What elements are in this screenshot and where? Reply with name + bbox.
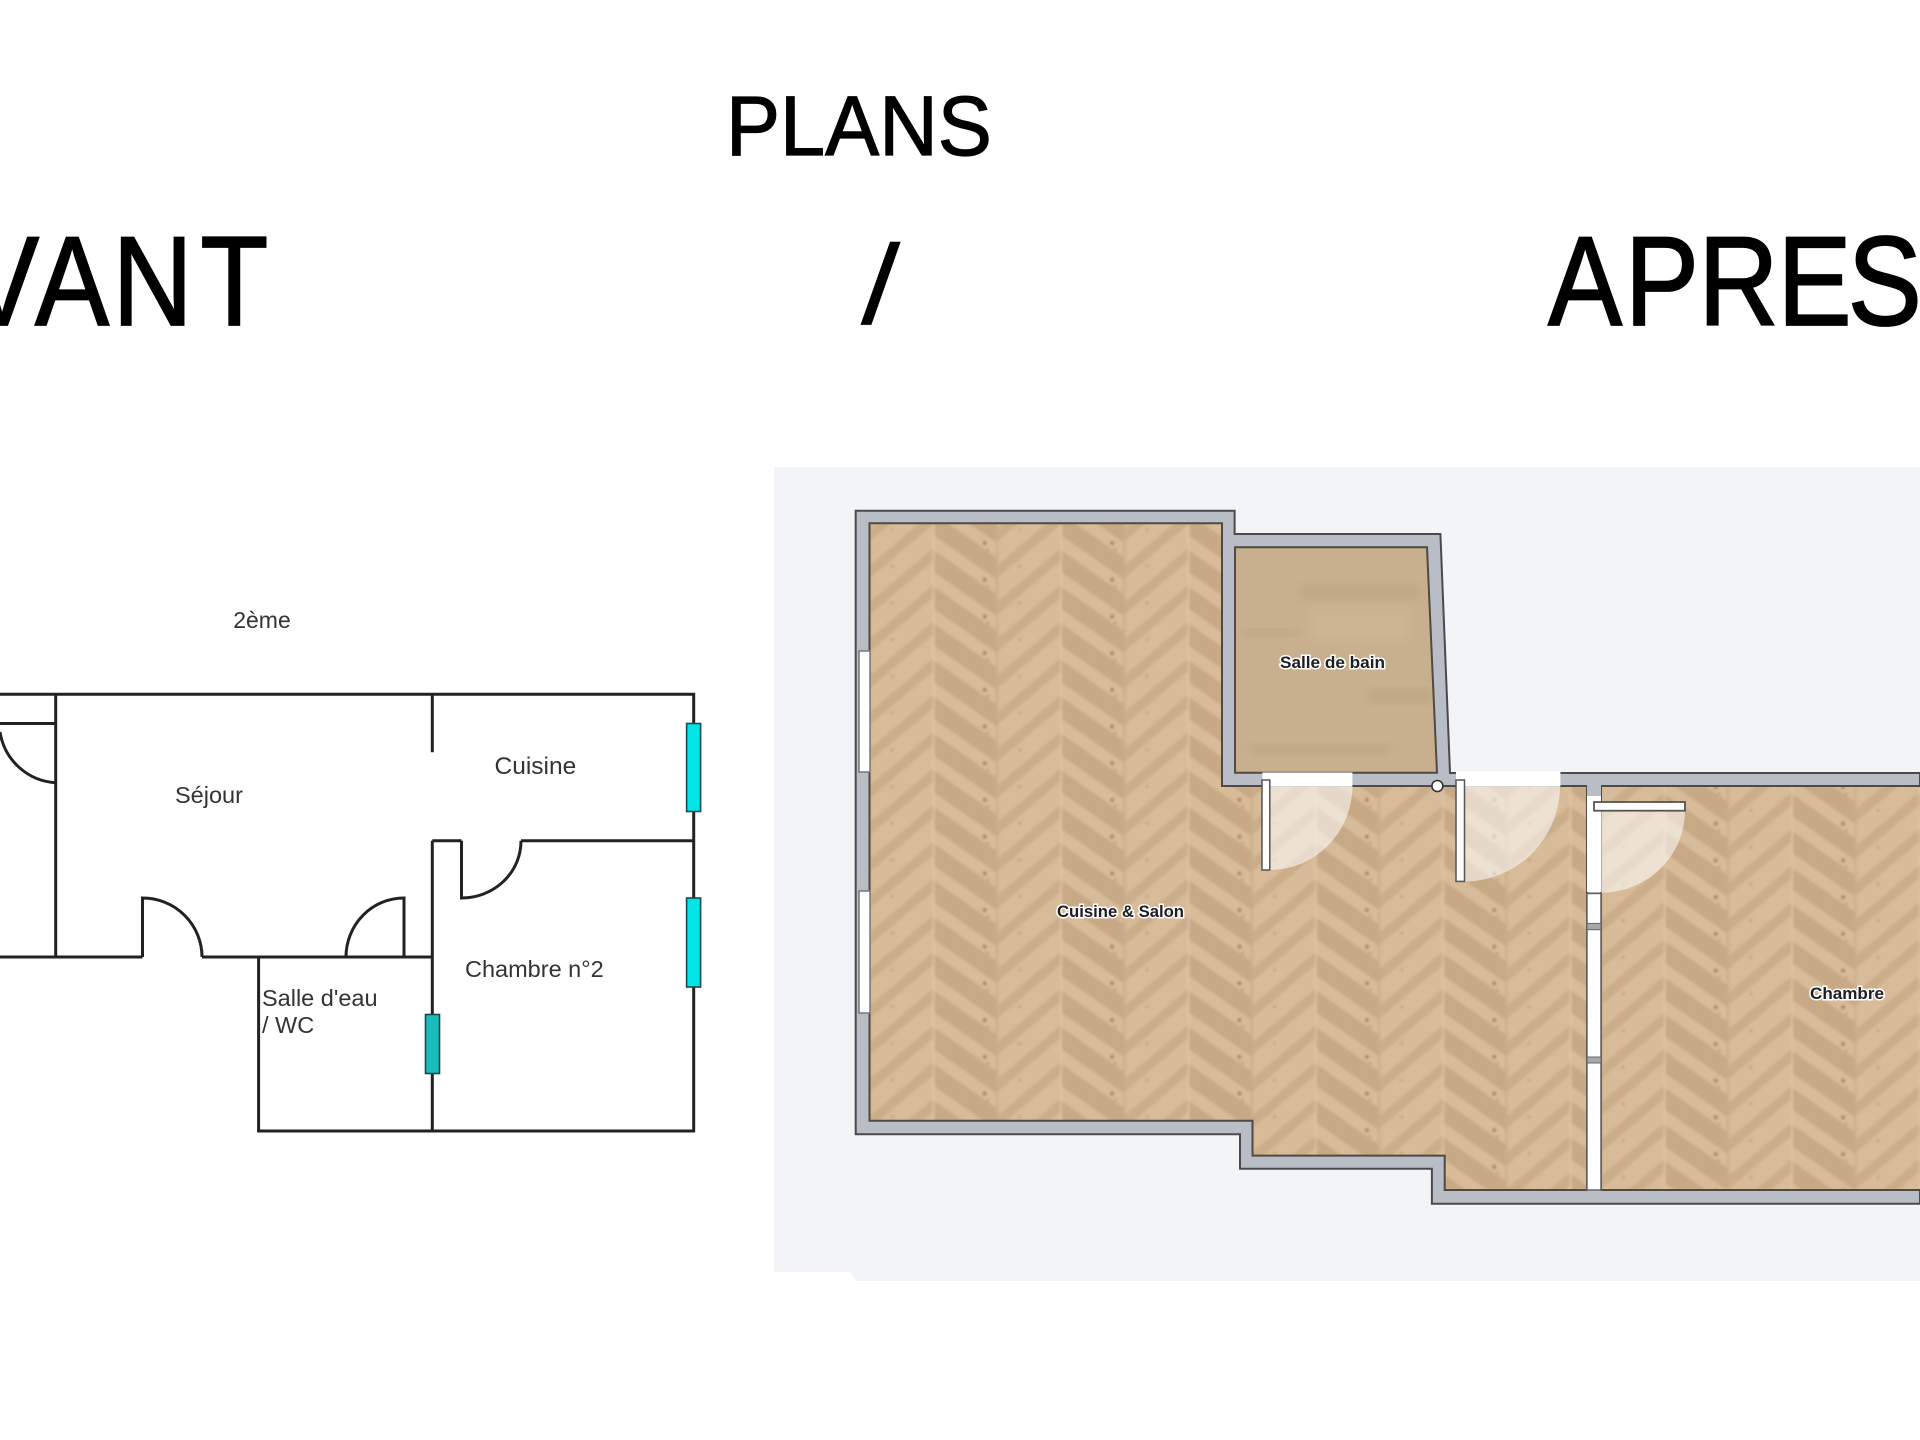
door swings	[0, 732, 521, 957]
doorway: entrée	[1456, 771, 1560, 786]
label: Salle de bain: Salle de bain	[1280, 653, 1385, 672]
floor: salle de bain	[1236, 548, 1436, 772]
room label: Chambre n°2: Chambre n°2	[465, 956, 604, 982]
partition separator lower	[1587, 1057, 1601, 1063]
chambre floor outline	[1601, 786, 1920, 1190]
floor: cuisine et salon	[850, 510, 1600, 1200]
partition stub	[1587, 785, 1601, 796]
door leaf: salle de bain	[1262, 780, 1270, 870]
walls and partitions	[0, 694, 694, 1131]
door leaf: chambre	[1594, 802, 1685, 811]
door swing: chambre	[1601, 811, 1685, 893]
partition opening	[1587, 796, 1601, 892]
partition windows	[1587, 894, 1601, 1190]
partition separator upper	[1587, 923, 1601, 930]
floor outline	[870, 523, 1587, 1190]
window: left wall upper	[859, 651, 870, 772]
column dot	[1432, 780, 1443, 792]
floor label: 2ème: 2ème	[233, 607, 291, 633]
window: chambre n°2	[687, 898, 701, 987]
window: cuisine	[687, 724, 701, 812]
floor: chambre	[1590, 775, 1920, 1200]
title: PLANS: PLANS	[726, 80, 992, 173]
room label: Séjour: Séjour	[175, 782, 243, 808]
room label: Cuisine: Cuisine	[494, 753, 576, 780]
heading separator slash: /	[860, 221, 901, 349]
plan before renovation	[0, 607, 701, 1131]
bathroom outline	[1235, 547, 1437, 773]
room label: Salle d'eau / WC: Salle d'eau	[262, 985, 378, 1011]
label: Cuisine & Salon: Cuisine & Salon	[1057, 902, 1184, 921]
door swing: salle de bain	[1270, 786, 1352, 870]
window: left wall lower	[859, 891, 870, 1013]
door leaf: entrée	[1456, 780, 1464, 881]
plan after renovation panel	[774, 467, 1920, 1281]
doorway: salle de bain	[1262, 772, 1352, 786]
outer walls	[856, 511, 1920, 1204]
heading: APRES: APRES	[1548, 211, 1920, 353]
label: Chambre: Chambre	[1810, 984, 1884, 1003]
panel background	[774, 467, 1920, 1281]
room label: Salle d'eau / WC: / WC	[262, 1012, 314, 1038]
window: salle d'eau	[426, 1014, 440, 1074]
door swing: entrée	[1464, 786, 1560, 881]
